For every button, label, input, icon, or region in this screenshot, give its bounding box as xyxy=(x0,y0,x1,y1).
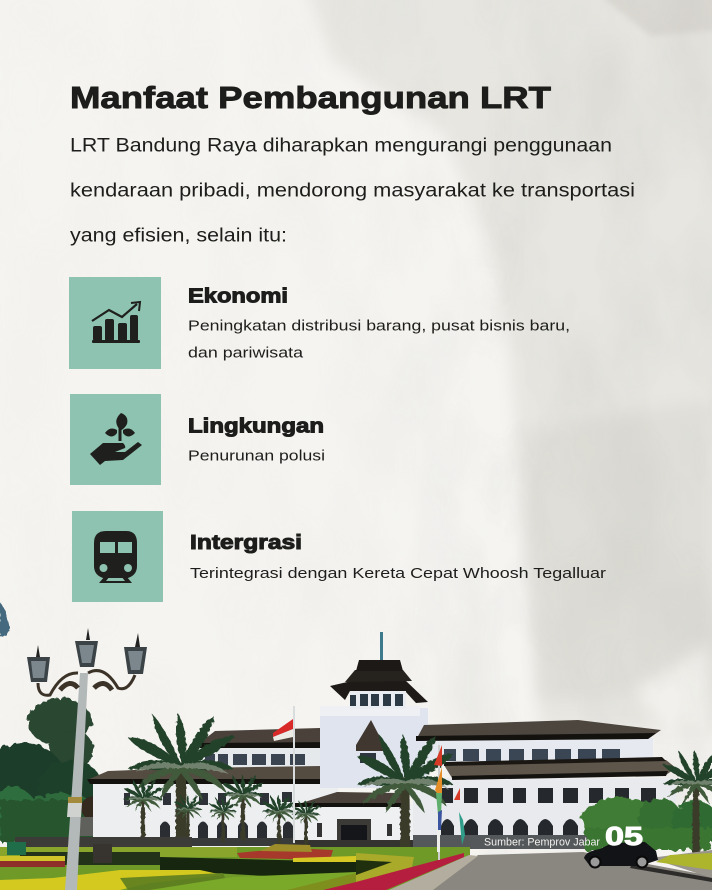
icon box: chart xyxy=(69,277,161,369)
building: tower xyxy=(320,632,428,788)
panel: integrasi xyxy=(72,511,606,602)
statue and monument xyxy=(79,796,115,836)
text: ekonomi: dan pariwisata xyxy=(188,346,304,362)
heading: ekonomi: Ekonomi xyxy=(188,286,288,308)
text: ekonomi xyxy=(188,318,570,362)
trees left xyxy=(0,698,102,843)
trees right xyxy=(582,797,712,850)
text: ekonomi: Peningkatan distribusi barang, pusat bisnis baru, xyxy=(188,318,570,334)
road xyxy=(389,850,712,890)
text: lingkungan: Penurunan polusi xyxy=(188,448,325,464)
intro text: yang efisien, selain itu: xyxy=(70,226,287,246)
palms xyxy=(123,714,712,888)
heading: lingkungan: Lingkungan xyxy=(188,416,324,438)
foliage top-left fragment xyxy=(0,602,10,637)
source caption: Sumber: Pemprov Jabar xyxy=(484,836,600,848)
intro text xyxy=(70,136,635,246)
background: textured paper wash xyxy=(312,0,712,793)
street lamp xyxy=(27,628,147,890)
panel: lingkungan xyxy=(70,394,325,485)
photo: gedung Gubernur with gardens xyxy=(0,602,712,890)
page number: 05 xyxy=(605,821,643,851)
title: Manfaat Pembangunan LRT xyxy=(70,80,551,115)
building: central wing xyxy=(295,792,415,847)
flags xyxy=(273,706,465,860)
icon box: plant in hand xyxy=(70,394,161,485)
lawn and gardens xyxy=(0,837,470,890)
intro text: LRT Bandung Raya diharapkan mengurangi penggunaan xyxy=(70,136,612,156)
car xyxy=(584,842,658,868)
intro text: kendaraan pribadi, mendorong masyarakat ke transportasi xyxy=(70,180,635,202)
building: right wing xyxy=(413,720,676,849)
icon box: train xyxy=(72,511,163,602)
panel: ekonomi xyxy=(69,277,570,369)
text: intergrasi: Terintegrasi dengan Kereta Cepat Whoosh Tegalluar xyxy=(190,566,606,582)
building: left wing xyxy=(87,728,354,846)
heading: intergrasi: Intergrasi xyxy=(190,532,302,554)
